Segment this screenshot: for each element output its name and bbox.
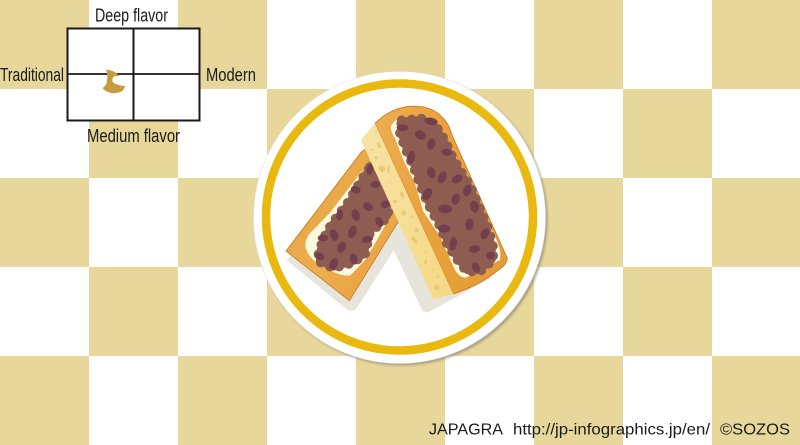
food shadows [287, 170, 493, 312]
left toast beans [314, 164, 391, 271]
plate [254, 72, 548, 366]
axis label: medium flavor: Medium flavor [87, 126, 180, 146]
food illustration [286, 106, 507, 312]
bread air holes [371, 131, 439, 290]
chart grid [67, 28, 200, 120]
plate body [254, 72, 546, 364]
right toast beans [397, 117, 495, 274]
credit: JAPAGRA: JAPAGRA [429, 422, 503, 438]
credit: copyright: ©SOZOS [720, 422, 790, 438]
credit: URL: http://jp-infographics.jp/en/ [513, 422, 711, 438]
right toast bread side [361, 123, 453, 299]
right toast cream [391, 118, 500, 277]
right toast crust [375, 106, 507, 294]
plate yellow ring [266, 84, 533, 350]
icon: food marker [102, 70, 126, 93]
credit line [429, 422, 790, 438]
right toast bean paste [399, 118, 493, 272]
axis label: traditional: Traditional [0, 65, 64, 85]
left toast cream [305, 171, 390, 276]
axis label: deep flavor: Deep flavor [95, 6, 168, 26]
left toast crust [286, 148, 398, 301]
plate shadow [256, 74, 548, 366]
axis label: modern: Modern [206, 65, 256, 85]
left toast bean paste [318, 167, 388, 268]
right toast [361, 106, 507, 299]
flavor positioning chart [0, 6, 256, 146]
left toast [286, 148, 398, 301]
